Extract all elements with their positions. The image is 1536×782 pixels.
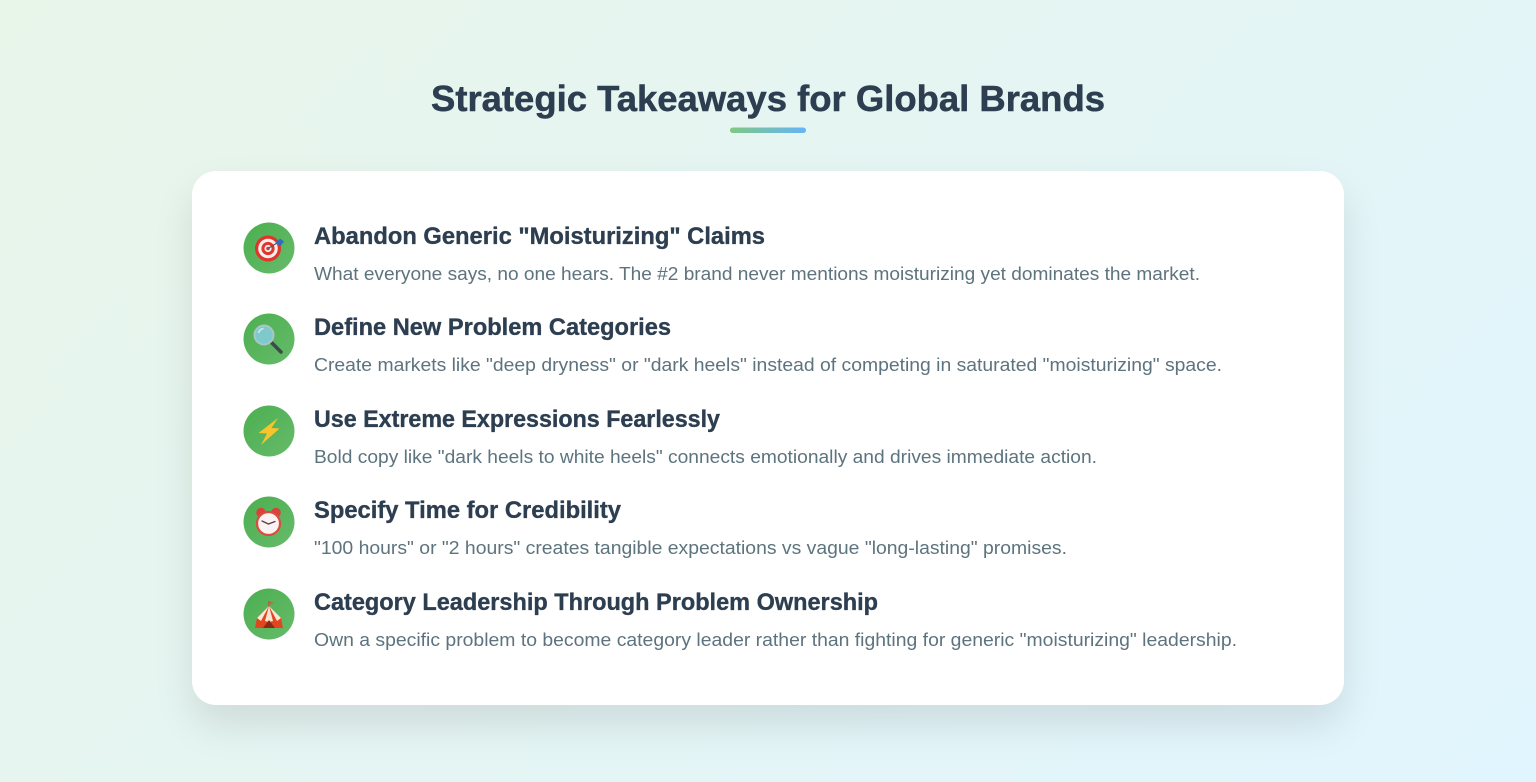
- icon: magnifying glass: [244, 314, 294, 364]
- heading: Use Extreme Expressions Fearlessly: [314, 406, 721, 433]
- description: Own a specific problem to become category leader rather than fighting for generic "moisturizing" leadership.: [314, 630, 1237, 650]
- takeaway 5: [244, 588, 1237, 650]
- icon: circus tent: [244, 588, 294, 640]
- title underline: [730, 128, 806, 133]
- icon: lightning bolt: [244, 406, 294, 456]
- takeaway 4: [244, 496, 1067, 558]
- description: Create markets like "deep dryness" or "dark heels" instead of competing in saturated "moisturizing" space.: [314, 355, 1222, 375]
- panel: takeaways card: [192, 171, 1344, 705]
- heading: Specify Time for Credibility: [314, 497, 622, 524]
- takeaway 2: [244, 314, 1222, 375]
- takeaway 3: [244, 406, 1097, 467]
- description: "100 hours" or "2 hours" creates tangible expectations vs vague "long-lasting" promises.: [314, 538, 1067, 558]
- heading: Define New Problem Categories: [314, 314, 671, 341]
- icon: target with dart: [244, 222, 294, 274]
- title: Strategic Takeaways for Global Brands: [431, 78, 1105, 119]
- heading: Abandon Generic "Moisturizing" Claims: [314, 223, 765, 250]
- description: Bold copy like "dark heels to white heels" connects emotionally and drives immediate action.: [314, 447, 1097, 467]
- takeaway 1: [244, 222, 1200, 284]
- icon: alarm clock: [244, 496, 294, 548]
- description: What everyone says, no one hears. The #2 brand never mentions moisturizing yet dominates the market.: [314, 264, 1200, 284]
- heading: Category Leadership Through Problem Ownership: [314, 589, 878, 616]
